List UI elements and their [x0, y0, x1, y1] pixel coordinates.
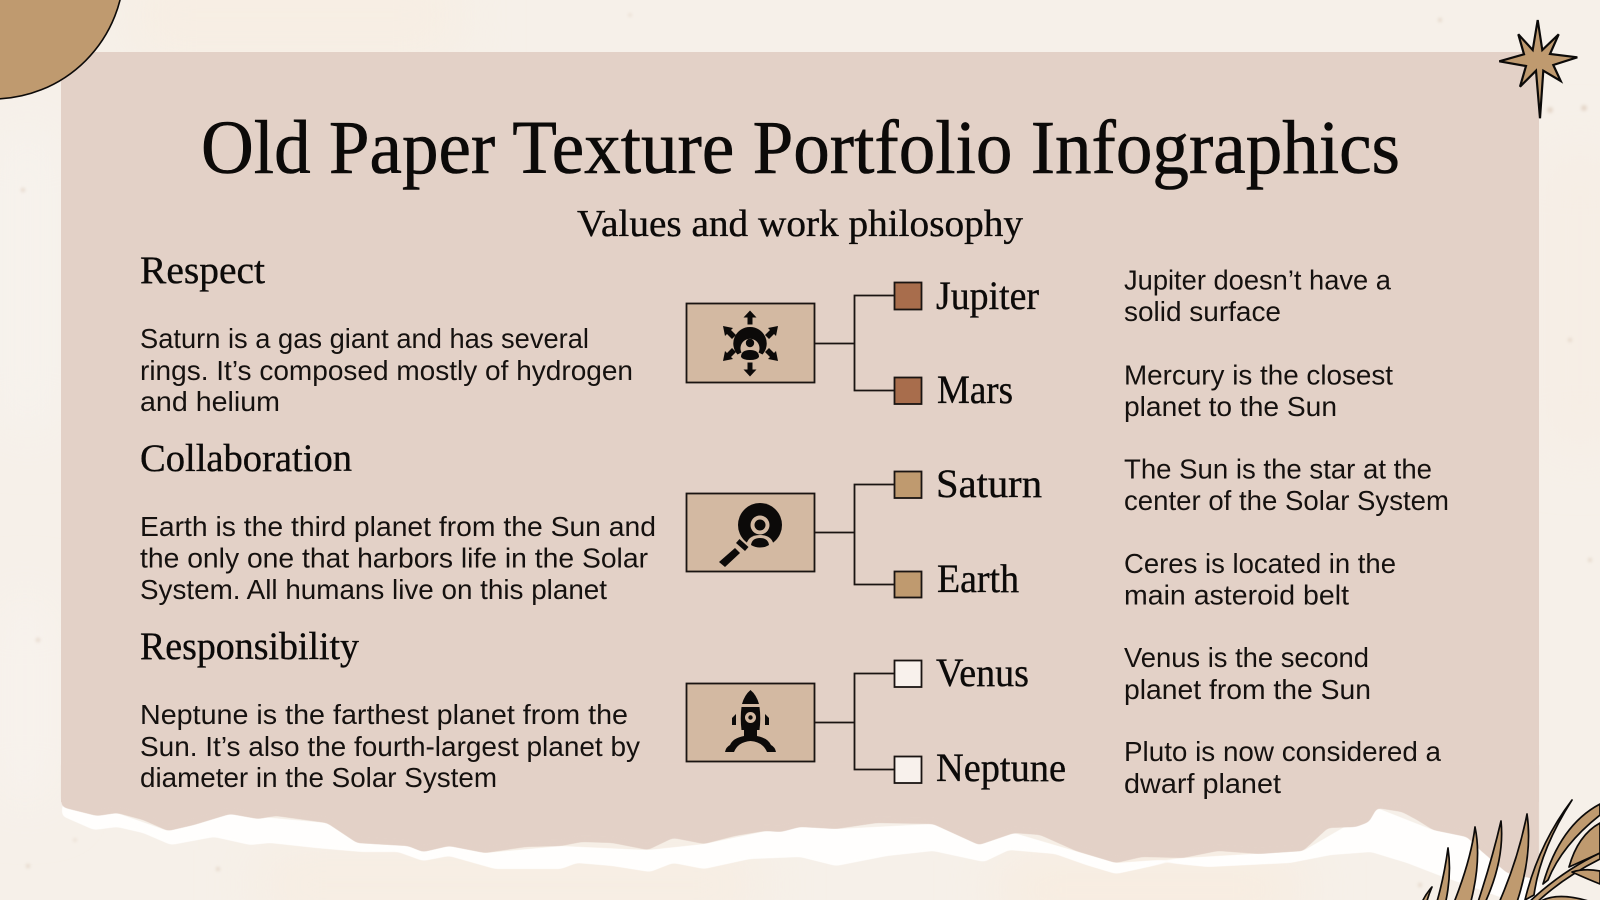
connector lines — [815, 296, 894, 770]
icon box: people network — [686, 304, 814, 382]
heading: Responsibility: Responsibility — [140, 625, 359, 668]
icon: magnifying glass on person — [719, 503, 782, 567]
text: Sun note: The Sun is the star at the — [1124, 454, 1432, 484]
text: Pluto note: Pluto is now considered a — [1124, 736, 1442, 767]
item: Jupiter: Jupiter — [936, 273, 1039, 318]
text: Ceres note: Ceres is located in the — [1124, 548, 1396, 579]
text: Responsibility description — [140, 699, 640, 793]
text: Respect description — [140, 323, 633, 417]
text: Mercury note: planet to the Sun — [1124, 391, 1337, 422]
text: Sun note — [1124, 454, 1449, 516]
item: Mars — [894, 367, 1013, 412]
item: Venus: Venus — [936, 650, 1029, 695]
text: Responsibility description: Neptune is the farthest planet from the — [140, 699, 628, 730]
icon: person with outward arrows — [723, 310, 778, 376]
text: Collaboration description — [140, 511, 656, 605]
item: Saturn: Saturn — [936, 461, 1042, 506]
text: Responsibility description: Sun. It’s also the fourth-largest planet by — [140, 731, 640, 762]
text: Jupiter note: Jupiter doesn’t have a — [1124, 264, 1392, 296]
icon box: rocket — [686, 684, 814, 762]
block: Collaboration — [140, 437, 656, 605]
text: Ceres note: main asteroid belt — [1124, 580, 1349, 610]
text: Venus note — [1124, 642, 1371, 705]
block: Respect — [140, 249, 633, 417]
text: Collaboration description: Earth is the third planet from the Sun and — [140, 511, 656, 542]
text: Jupiter note — [1124, 264, 1392, 327]
text: Mercury note: Mercury is the closest — [1124, 360, 1393, 390]
decorative star — [1499, 20, 1577, 118]
text: Respect description: rings. It’s composed mostly of hydrogen — [140, 355, 633, 386]
item: Earth: Earth — [937, 556, 1019, 601]
text: Venus note: planet from the Sun — [1124, 674, 1371, 705]
subtitle: Values and work philosophy — [577, 203, 1023, 245]
text: Respect description: and helium — [140, 386, 280, 417]
text: Jupiter note: solid surface — [1124, 296, 1281, 327]
text: Responsibility description: diameter in the Solar System — [140, 762, 497, 793]
text: Collaboration description: the only one that harbors life in the Solar — [140, 542, 648, 574]
text: Pluto note: dwarf planet — [1124, 768, 1281, 799]
text: Collaboration description: System. All humans live on this planet — [140, 574, 607, 605]
item: Earth — [894, 556, 1019, 601]
text: Mercury note — [1124, 360, 1393, 422]
heading: Collaboration: Collaboration — [140, 437, 352, 480]
decorative palm leaf — [1421, 800, 1600, 900]
text: Pluto note — [1124, 736, 1442, 799]
item: Venus — [894, 650, 1029, 695]
heading: Respect: Respect — [140, 249, 265, 292]
text: Ceres note — [1124, 548, 1396, 610]
decorative corner circle — [0, 0, 124, 99]
title: Old Paper Texture Portfolio Infographics — [201, 106, 1400, 190]
block: Responsibility — [140, 625, 640, 793]
icon box: magnifier over person — [686, 494, 814, 572]
icon: rocket — [725, 690, 776, 752]
item: Neptune: Neptune — [936, 745, 1066, 790]
item: Jupiter — [894, 273, 1039, 318]
torn white paper strip — [62, 800, 1540, 900]
text: Sun note: center of the Solar System — [1124, 485, 1449, 516]
text: Venus note: Venus is the second — [1124, 642, 1369, 673]
item: Mars: Mars — [937, 367, 1013, 412]
text: Respect description: Saturn is a gas giant and has several — [140, 323, 589, 354]
